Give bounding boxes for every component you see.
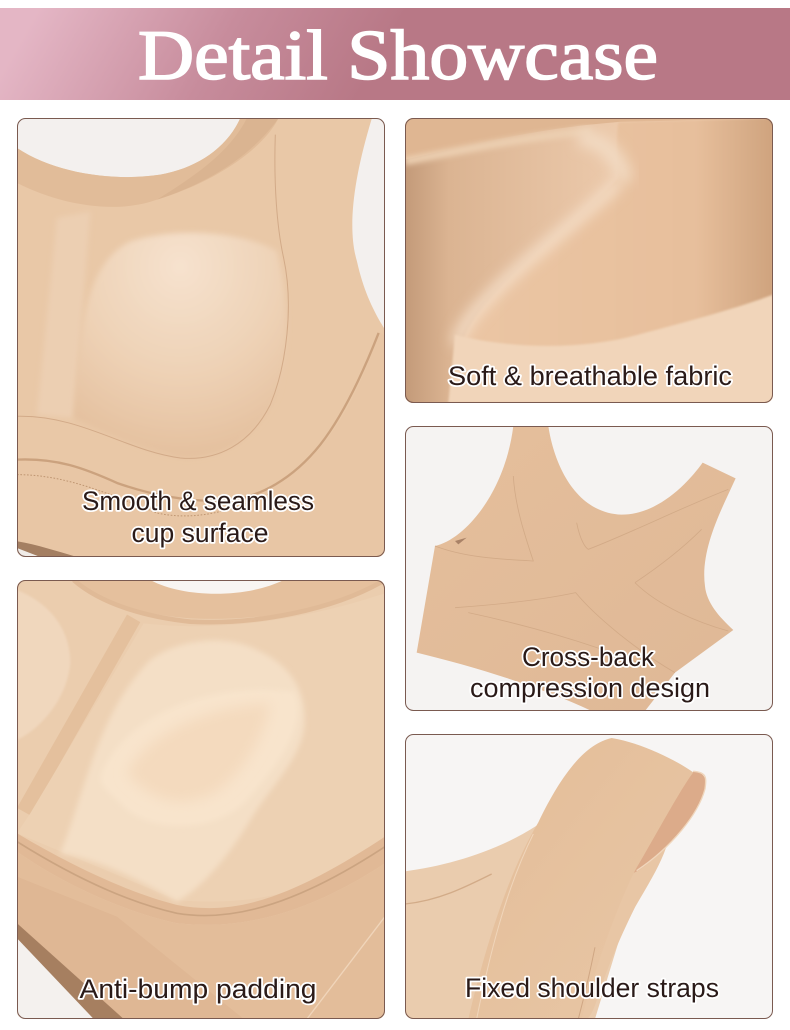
caption: straps: Fixed shoulder straps [465,973,719,1003]
caption: padding: Anti-bump padding [80,974,316,1004]
icon: strap front [468,738,693,1019]
panel: fixed shoulder straps [405,734,773,1019]
panel: soft fabric [405,118,773,403]
icon: strap back [582,848,666,1018]
icon: back garment [405,826,638,1019]
caption: soft fabric: Soft & breathable fabric [448,361,732,391]
icon: moulded cup [84,231,284,396]
caption: smooth cup: Smooth & seamless [82,486,314,516]
panel: smooth cup surface [17,118,385,557]
panel: anti-bump padding [17,580,385,1019]
caption: smooth cup [82,486,314,548]
icon: foam pad [60,641,305,902]
caption: smooth cup: cup surface [132,518,268,548]
icon: strap inner [632,771,706,874]
header banner [0,8,790,100]
panel: cross-back design [405,426,773,711]
icon: cross-back garment [417,426,736,711]
caption: cross-back [470,642,710,703]
caption: cross-back: Cross-back [522,642,654,672]
title: Detail Showcase [138,17,658,95]
caption: cross-back: compression design [470,673,710,703]
